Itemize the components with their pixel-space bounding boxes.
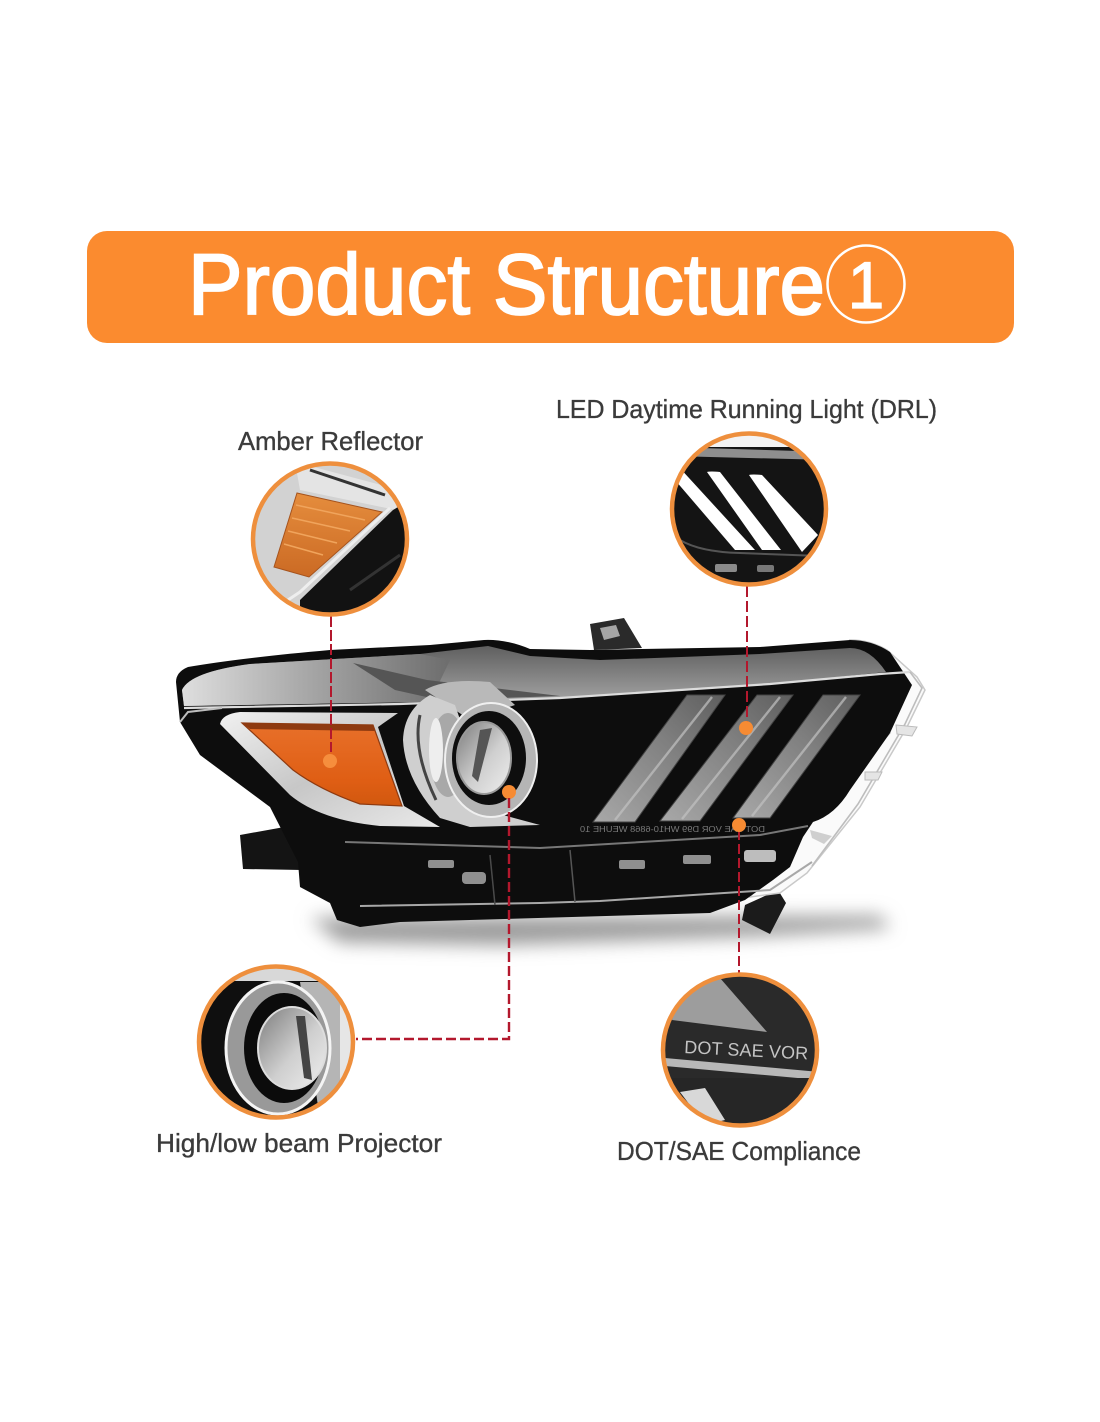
ground shadow [310,916,890,945]
projector lens assembly [403,681,540,827]
lower housing trim lines [345,826,808,848]
connector: amber reflector [323,616,337,768]
circled number 1 [828,246,904,322]
title banner [87,231,1014,343]
top mounting bracket [590,618,642,650]
connector: projector [356,785,516,1039]
clear lens upper band [182,646,886,706]
DOT SAE VOR marking: DOT SAE VOR [684,1037,809,1063]
right lower bracket [742,890,786,934]
clear lens outer shape on right [750,640,925,897]
connector: DRL [739,586,753,735]
headlight product photo illustration [176,618,925,945]
detail circle: LED DRL [670,430,830,590]
detail circle: projector [195,960,357,1122]
detail circle: amber reflector [250,460,410,620]
housing outline [176,640,912,927]
circled number 1: 1 [848,248,884,322]
left mounting tab [240,826,302,870]
mirrored DOT marking text: DOT SAE VOR D99 WH10-6868 WEUHE 10 [580,824,765,834]
connector: DOT [732,818,746,973]
projector halo ring [445,703,537,817]
label: DOT/SAE Compliance: DOT/SAE Compliance [617,1136,861,1166]
detail circle: DOT/SAE [660,970,820,1130]
clear lens white edge line [184,672,910,708]
DRL light bars [593,695,860,822]
label: High/low beam Projector: High/low beam Projector [156,1128,442,1158]
label: LED Daytime Running Light (DRL): LED Daytime Running Light (DRL) [556,394,937,424]
projector lens [457,722,511,794]
label: Amber Reflector: Amber Reflector [238,426,423,456]
chrome reflector surround [220,712,440,827]
title text: Product Structure [188,237,825,333]
side lens fins [865,725,917,780]
lower housing clips [428,830,832,884]
amber reflector [242,723,402,806]
